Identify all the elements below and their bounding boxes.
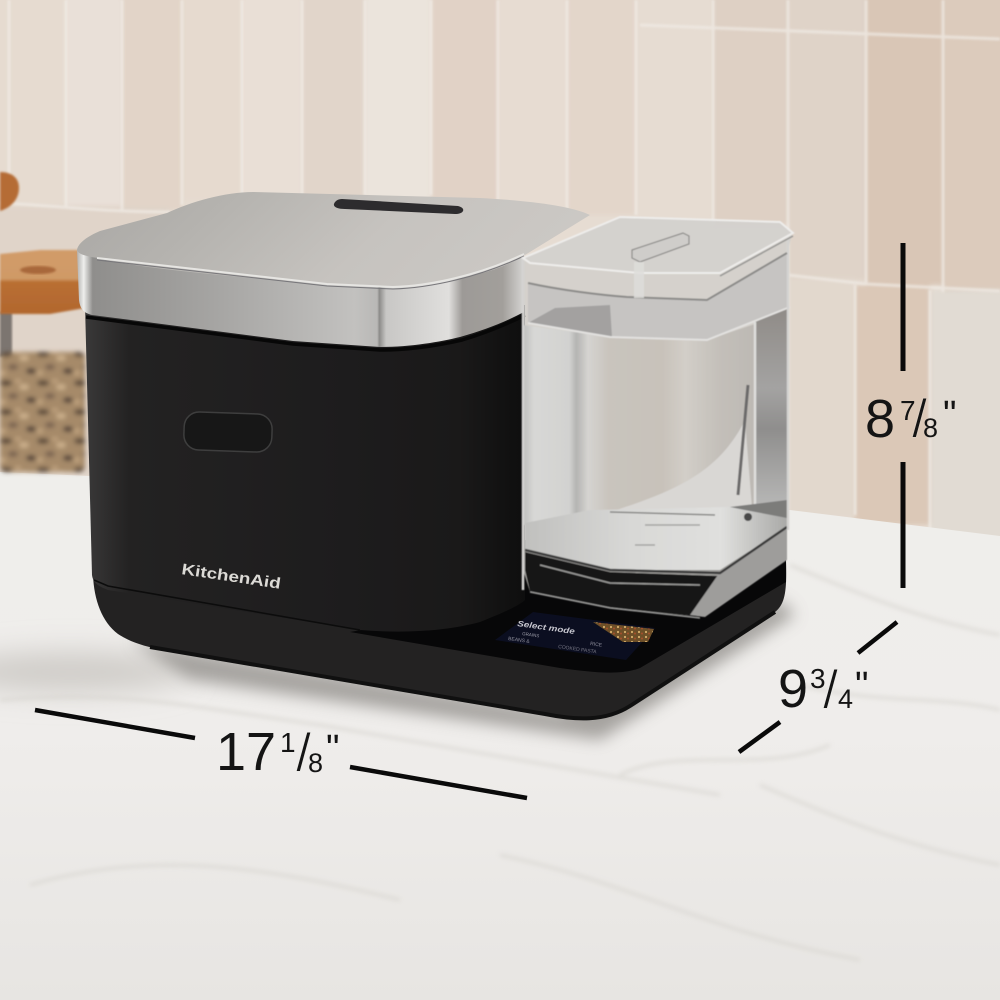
dimension: height 8 7/8 inches: " <box>943 394 956 436</box>
stainless lid <box>77 192 590 287</box>
steam button <box>183 411 273 453</box>
stainless band <box>77 250 524 347</box>
tank glass outline <box>523 240 788 590</box>
dimension: depth 9 3/4 inches: " <box>855 665 868 707</box>
dimension: width 17 1/8 inches: 1 <box>280 727 296 758</box>
marble countertop <box>0 472 1000 1000</box>
touch screen display: BEANS & <box>508 636 531 645</box>
main black body <box>85 305 525 632</box>
background jars: wood lid and grains <box>0 172 85 472</box>
dimension: height 8 7/8 inches: 7 <box>900 395 916 426</box>
touch screen display: COOKED PASTA <box>558 644 598 655</box>
touch screen display: GRAINS <box>522 631 540 638</box>
brand logo: KitchenAid <box>180 561 282 593</box>
touch screen display: Select mode <box>517 619 576 636</box>
clear lid <box>523 217 793 272</box>
dimension: height 8 7/8 inches: / <box>912 389 927 449</box>
dimension: depth 9 3/4 inches: / <box>823 660 838 720</box>
dimension: depth 9 3/4 inches: 3 <box>810 663 826 694</box>
dimension: width 17 1/8 inches: 17 <box>216 722 276 782</box>
touch screen display <box>495 612 656 660</box>
dimension: width 17 1/8 inches: " <box>326 728 340 770</box>
dimension: width 17 1/8 inches: / <box>296 723 311 783</box>
water volume <box>523 324 755 525</box>
dimension: height 8 7/8 inches: 8 <box>923 413 938 443</box>
dimension: height 8 7/8 inches <box>865 243 956 588</box>
dimension: width 17 1/8 inches: 8 <box>308 748 323 778</box>
dimension: depth 9 3/4 inches: 4 <box>838 684 853 714</box>
dimension: depth 9 3/4 inches: 9 <box>778 659 808 719</box>
lid handle <box>632 233 689 262</box>
dimension: height 8 7/8 inches: 8 <box>865 389 895 449</box>
touch screen display: RICE <box>590 641 603 649</box>
dimension: width 17 1/8 inches <box>35 710 527 798</box>
cast shadow on counter <box>130 600 795 740</box>
tank shell <box>523 217 793 617</box>
tiled wall background <box>0 0 1000 560</box>
dimension: depth 9 3/4 inches <box>739 622 897 752</box>
water tank <box>523 217 793 618</box>
tank base section <box>525 552 720 617</box>
rice cooker product <box>77 192 793 718</box>
tank floor <box>525 507 787 570</box>
lid handle slot <box>334 199 463 214</box>
base plate <box>93 560 786 718</box>
